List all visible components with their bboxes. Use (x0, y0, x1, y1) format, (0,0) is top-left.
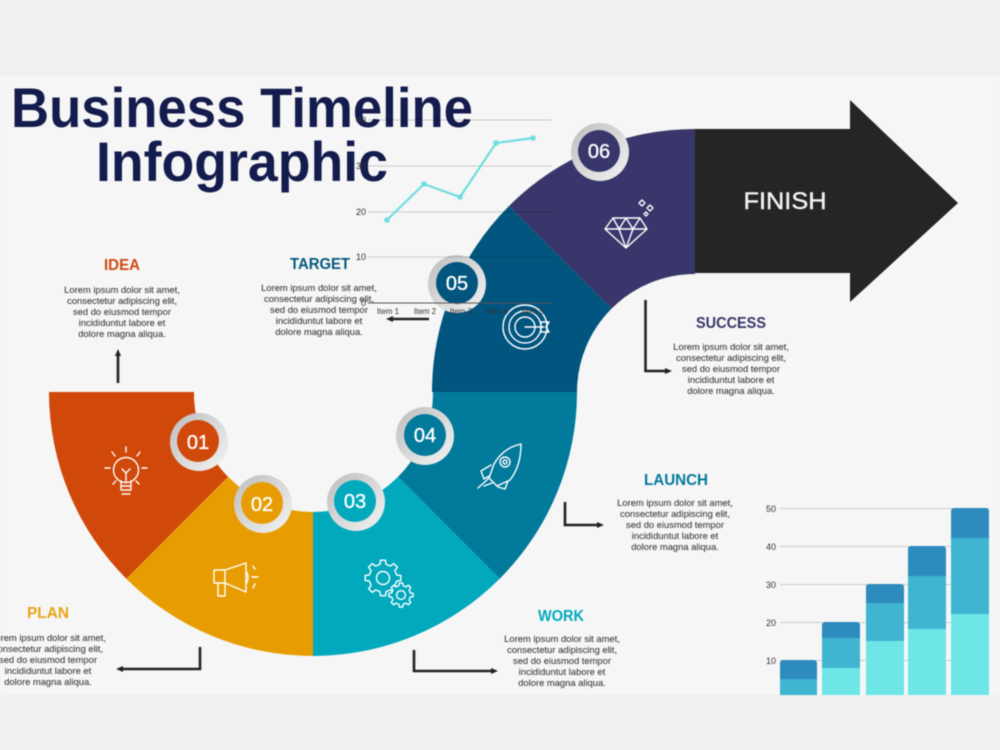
text block: idea: sed do eiusmod tempor (73, 306, 171, 317)
line chart: Item 1 (377, 307, 400, 316)
timeline ribbon (49, 129, 695, 656)
text block: launch: consectetur adipiscing elit, (620, 508, 730, 519)
icon: target (503, 305, 549, 349)
text block: target: TARGET (290, 256, 350, 273)
badge 03 (327, 473, 385, 531)
text block: success: incididuntut labore et (688, 374, 775, 385)
text block: target: sed do eiusmod tempor (270, 304, 368, 315)
stacked bar chart: 40 (766, 542, 776, 552)
badge 05 (428, 255, 486, 313)
segment 06 success (509, 129, 695, 309)
badge 05: 05 (446, 273, 468, 295)
badge 03: 03 (344, 491, 366, 513)
text block: idea: IDEA (104, 257, 140, 274)
text block: idea (64, 257, 180, 339)
finish arrow (695, 100, 958, 302)
badge 02 (234, 475, 292, 533)
line chart: 10 (356, 252, 366, 262)
text block: plan: incididuntut labore et (5, 665, 92, 676)
icon: megaphone (214, 563, 258, 596)
badge 02: 02 (251, 494, 273, 516)
text block: work: incididuntut labore et (519, 666, 606, 677)
arrow: idea (115, 349, 121, 383)
stacked bar chart: 50 (766, 504, 776, 514)
text block: target: Lorem ipsum dolor sit amet, (261, 282, 377, 293)
bar 1 (780, 660, 817, 695)
text block: launch: dolore magna aliqua. (631, 541, 719, 552)
text block: work (504, 608, 620, 688)
text block: launch: incididuntut labore et (632, 530, 719, 541)
line chart: 0 (361, 298, 366, 308)
text block: plan: PLAN (27, 605, 69, 622)
title (11, 76, 473, 193)
text block: work: Lorem ipsum dolor sit amet, (504, 633, 620, 644)
text block: target: dolore magna aliqua. (275, 326, 363, 337)
badge 06 (571, 123, 629, 181)
segment 02 plan (126, 477, 313, 656)
arrow: launch (565, 502, 604, 528)
arrow: target (386, 316, 429, 322)
badge 01: 01 (187, 432, 209, 454)
text block: idea: Lorem ipsum dolor sit amet, (64, 284, 180, 295)
segment 03 work (313, 477, 500, 656)
stacked bar chart (766, 504, 989, 695)
text block: work: dolore magna aliqua. (518, 677, 606, 688)
arrow: plan (116, 647, 200, 672)
stacked bar chart: 20 (766, 618, 776, 628)
text block: plan (0, 605, 106, 687)
line chart: Item 3 (450, 307, 473, 316)
text block: work: WORK (538, 608, 584, 625)
text block: idea: incididuntut labore et (79, 317, 166, 328)
bar 5 (951, 508, 989, 695)
line chart: Item 5 (522, 307, 545, 316)
badge 06: 06 (588, 141, 610, 163)
text block: success: SUCCESS (696, 315, 766, 332)
line chart: Item 2 (414, 307, 437, 316)
icon: rocket (478, 444, 521, 489)
badge 04: 04 (414, 425, 436, 447)
arrow: success (646, 300, 672, 374)
title: Infographic (96, 130, 388, 193)
text block: success: dolore magna aliqua. (687, 385, 775, 396)
text block: work: consectetur adipiscing elit, (507, 644, 617, 655)
text block: launch: sed do eiusmod tempor (626, 519, 724, 530)
stacked bar chart: 10 (766, 656, 776, 666)
bar 3 (866, 584, 904, 695)
arrow: work (414, 650, 498, 674)
bar 4 (908, 546, 946, 695)
text block: plan: sed do eiusmod tempor (0, 654, 97, 665)
line chart: 40 (356, 115, 366, 125)
stacked bar chart: 30 (766, 580, 776, 590)
text block: success: sed do eiusmod tempor (682, 363, 780, 374)
line chart: 20 (356, 207, 366, 217)
finish arrow: FINISH (744, 188, 826, 215)
icon: light bulb (105, 447, 147, 494)
segment 01 idea (49, 392, 228, 579)
bar 2 (822, 622, 860, 695)
line chart (356, 115, 552, 316)
segment 04 launch (398, 392, 577, 579)
text block: idea: consectetur adipiscing elit, (67, 295, 177, 306)
icon: gears (365, 560, 413, 607)
text block: launch: Lorem ipsum dolor sit amet, (617, 497, 733, 508)
text block: idea: dolore magna aliqua. (78, 328, 166, 339)
text block: work: sed do eiusmod tempor (513, 655, 611, 666)
text block: target: incididuntut labore et (276, 315, 363, 326)
line chart: 30 (356, 161, 366, 171)
icon: diamond (605, 200, 653, 248)
badge 01 (170, 413, 228, 471)
text block: success: Lorem ipsum dolor sit amet, (673, 341, 789, 352)
segment 05 target (432, 206, 612, 392)
text block: launch (617, 472, 733, 552)
title: Business Timeline (11, 76, 473, 139)
line chart: Item 4 (486, 307, 509, 316)
text block: target (261, 256, 377, 337)
text block: plan: dolore magna aliqua. (4, 676, 92, 687)
text block: target: consectetur adipiscing elit, (264, 293, 374, 304)
text block: success: consectetur adipiscing elit, (676, 352, 786, 363)
badge 04 (396, 407, 454, 465)
text block: launch: LAUNCH (644, 472, 708, 489)
text block: success (673, 315, 789, 396)
